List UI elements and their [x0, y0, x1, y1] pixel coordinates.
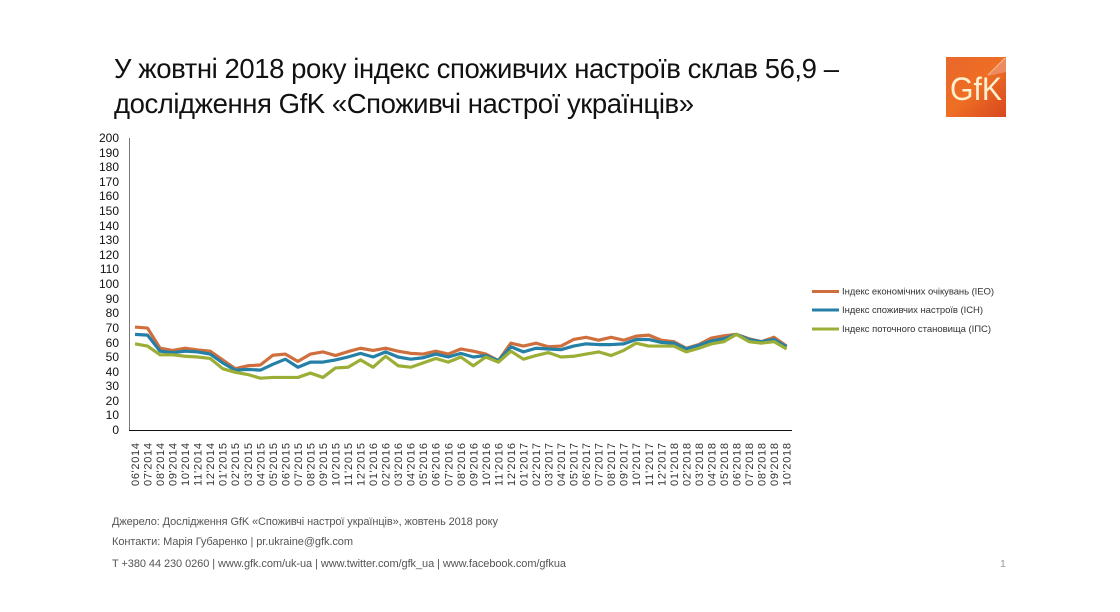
y axis labels: 130 [99, 233, 119, 247]
title: дослідження GfK «Споживчі настрої українців» [114, 88, 694, 119]
x axis labels: 06'2015 [280, 443, 292, 486]
y axis labels: 160 [99, 189, 119, 203]
x axis labels: 04'2018 [706, 443, 718, 486]
y axis labels: 180 [99, 160, 119, 174]
x axis labels: 11'2014 [193, 443, 205, 486]
y axis labels: 90 [106, 292, 119, 306]
y axis labels: 70 [106, 321, 119, 335]
x axis labels: 01'2016 [368, 443, 380, 486]
x axis labels: 03'2015 [243, 443, 255, 486]
x axis labels: 09'2018 [769, 443, 781, 486]
footer text [112, 516, 567, 570]
title [114, 53, 840, 119]
x axis labels: 12'2015 [356, 443, 368, 486]
data lines [135, 327, 787, 378]
x axis labels: 07'2016 [443, 443, 455, 486]
y axis labels: 30 [106, 379, 119, 393]
x axis labels: 05'2017 [569, 443, 581, 486]
x axis labels: 04'2015 [255, 443, 267, 486]
y axis labels: 120 [99, 248, 119, 262]
x axis labels: 02'2015 [230, 443, 242, 486]
x axis labels: 06'2016 [431, 443, 443, 486]
x axis labels: 06'2014 [130, 443, 142, 486]
icon: GfK logo [946, 57, 1006, 117]
series: ICH [135, 334, 787, 370]
title: У жовтні 2018 року індекс споживчих настроїв склав 56,9 – [114, 53, 840, 84]
y axis labels: 10 [106, 408, 119, 422]
line chart [99, 131, 794, 486]
x axis labels: 01'2018 [669, 443, 681, 486]
legend item: ICH: Індекс споживчих настроїв (ІСН) [842, 305, 983, 316]
x axis labels: 03'2017 [544, 443, 556, 486]
x axis labels: 08'2016 [456, 443, 468, 486]
y axis labels: 100 [99, 277, 119, 291]
x axis labels: 05'2016 [418, 443, 430, 486]
x axis labels: 07'2017 [594, 443, 606, 486]
x axis labels: 09'2014 [168, 443, 180, 486]
x axis labels: 06'2017 [581, 443, 593, 486]
x axis labels [130, 443, 794, 486]
x axis labels: 10'2014 [180, 443, 192, 486]
x axis labels: 02'2018 [681, 443, 693, 486]
links: T +380 44 230 0260 | www.gfk.com/uk-ua | www.twitter.com/gfk_ua | www.facebook.com/gfkua [112, 558, 567, 570]
x axis labels: 02'2016 [381, 443, 393, 486]
x axis labels: 12'2016 [506, 443, 518, 486]
series: IPS [135, 334, 787, 378]
x axis labels: 12'2017 [656, 443, 668, 486]
y axis labels: 110 [100, 262, 119, 276]
x axis labels: 01'2015 [218, 443, 230, 486]
y axis labels: 140 [99, 219, 119, 233]
legend item: IEO: Індекс економічних очікувань (ІЕО) [842, 286, 994, 298]
x axis labels: 03'2016 [393, 443, 405, 486]
y axis labels: 200 [99, 131, 119, 145]
y axis labels: 80 [106, 306, 119, 320]
axes [129, 138, 792, 430]
x axis labels: 08'2017 [606, 443, 618, 486]
y axis labels: 60 [106, 336, 119, 350]
x axis labels: 01'2017 [518, 443, 530, 486]
y axis labels: 40 [106, 365, 119, 379]
x axis labels: 07'2015 [293, 443, 305, 486]
x axis labels: 10'2018 [782, 443, 794, 486]
series: IEO [135, 327, 787, 369]
x axis labels: 06'2018 [732, 443, 744, 486]
legend item: IPS: Індекс поточного становища (ІПС) [842, 324, 991, 335]
x axis labels: 12'2014 [205, 443, 217, 486]
x axis labels: 05'2018 [719, 443, 731, 486]
x axis labels: 11'2016 [493, 443, 505, 486]
x axis labels: 09'2015 [318, 443, 330, 486]
x axis labels: 09'2017 [619, 443, 631, 486]
x axis labels: 03'2018 [694, 443, 706, 486]
legend [812, 286, 994, 335]
y axis labels [99, 131, 119, 437]
x axis labels: 07'2014 [142, 443, 154, 486]
x axis labels: 08'2014 [155, 443, 167, 486]
x axis labels: 10'2015 [330, 443, 342, 486]
page number: 1 [1000, 558, 1006, 570]
y axis labels: 20 [106, 394, 119, 408]
x axis labels: 11'2015 [343, 443, 355, 486]
x axis labels: 07'2018 [744, 443, 756, 486]
x axis labels: 04'2017 [556, 443, 568, 486]
x axis labels: 05'2015 [268, 443, 280, 486]
source: Джерело: Дослідження GfK «Споживчі настрої українців», жовтень 2018 року [112, 516, 498, 528]
contacts: Контакти: Марія Губаренко | pr.ukraine@gfk.com [112, 536, 353, 548]
x axis labels: 09'2016 [468, 443, 480, 486]
x axis labels: 08'2015 [305, 443, 317, 486]
x axis labels: 08'2018 [757, 443, 769, 486]
x axis labels: 10'2017 [631, 443, 643, 486]
y axis labels: 50 [106, 350, 119, 364]
x axis labels: 11'2017 [644, 443, 656, 486]
y axis labels: 170 [99, 175, 119, 189]
x axis labels: 02'2017 [531, 443, 543, 486]
y axis labels: 190 [99, 146, 119, 160]
y axis labels: 0 [112, 423, 119, 437]
x axis labels: 04'2016 [406, 443, 418, 486]
x axis labels: 10'2016 [481, 443, 493, 486]
y axis labels: 150 [99, 204, 119, 218]
icon: GfK logo: GfK [950, 71, 1002, 107]
